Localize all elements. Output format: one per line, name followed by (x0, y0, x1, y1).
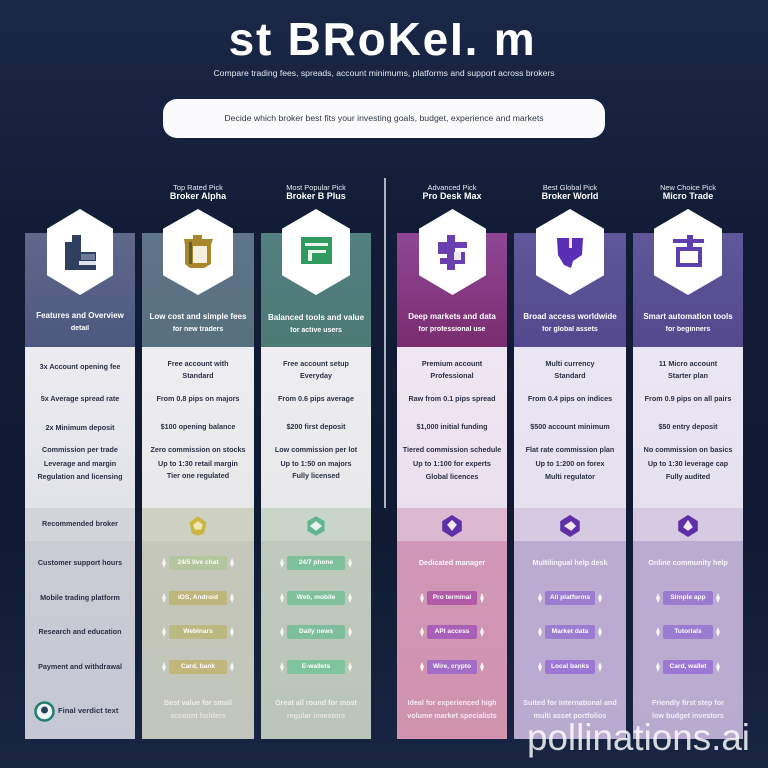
column 3 header band (261, 233, 371, 347)
column 6 lower section (633, 541, 743, 739)
icon: purple shield (557, 238, 583, 268)
footer note: Great all round for most (275, 698, 357, 707)
hexagon (419, 209, 486, 295)
hexagon (654, 209, 722, 295)
row: Recommended broker (42, 519, 118, 528)
icon: gold rating badge (190, 516, 206, 536)
rating pill (545, 660, 595, 674)
column 6 header band (633, 233, 743, 347)
icon: purple glyph (438, 235, 467, 270)
intro pill (163, 99, 605, 138)
column 4 heading: Deep markets and data (408, 312, 496, 321)
column 2 heading second line: for new traders (173, 326, 223, 333)
row: From 0.4 pips on indices (528, 394, 612, 403)
column 2 lower section (142, 541, 254, 739)
title: st BRoKeI. m (229, 13, 536, 65)
column 2 body (142, 347, 254, 508)
rating pill: Web, mobile (297, 594, 335, 601)
row: Multilingual help desk (532, 558, 608, 567)
rating pill (545, 591, 595, 605)
column 5 body (514, 347, 626, 508)
column 6 heading: Smart automation tools (643, 312, 733, 321)
row: Up to 1:100 for experts (413, 459, 491, 468)
column 6 body (633, 347, 743, 508)
rating pill (169, 660, 227, 674)
row: Leverage and margin (44, 459, 116, 468)
row: Fully licensed (292, 471, 340, 480)
row: Flat rate commission plan (526, 445, 614, 454)
panel: column 4 broker (397, 183, 507, 739)
footer note second line: account holders (170, 711, 226, 720)
row: 5x Average spread rate (41, 394, 119, 403)
icon: purple rating badge (678, 515, 698, 537)
column 4 lower section (397, 541, 507, 739)
column 5 header band (514, 233, 626, 347)
row: Up to 1:200 on forex (535, 459, 605, 468)
column 1 body (25, 347, 135, 508)
rating pill: Market data (552, 628, 588, 635)
rating pill (427, 625, 477, 639)
row: Low commission per lot (275, 445, 357, 454)
column 1 heading: Features and Overview (36, 311, 124, 320)
footer note: Ideal for experienced high (407, 698, 497, 707)
column 6 heading second line: for beginners (666, 326, 710, 333)
row: Up to 1:30 leverage cap (648, 459, 728, 468)
panel: column 2 broker (142, 183, 254, 739)
row: No commission on basics (644, 445, 732, 454)
column 4 highlight row (397, 508, 507, 541)
hexagon (163, 209, 233, 295)
row: $500 account minimum (530, 422, 610, 431)
rating pill (427, 591, 477, 605)
column 5 heading second line: for global assets (542, 326, 598, 333)
rating pill (663, 591, 713, 605)
row: $50 entry deposit (658, 422, 718, 431)
row: Tiered commission schedule (403, 445, 501, 454)
watermark: pollinations.ai (527, 717, 750, 758)
panel: column 6 broker (633, 183, 743, 739)
rating pill (169, 591, 227, 605)
row: Starter plan (668, 371, 708, 380)
icon: green rating badge (307, 516, 325, 536)
rating pill: Local banks (551, 663, 589, 670)
rating pill: Card, bank (181, 663, 215, 670)
icon: folder (65, 235, 96, 270)
column 4 label: Advanced Pick (428, 183, 476, 192)
icon: gold box (184, 235, 213, 268)
row: $100 opening balance (161, 422, 235, 431)
column 1 lower section (25, 541, 135, 739)
rating pill (287, 625, 345, 639)
rating pill (663, 660, 713, 674)
column 3 heading second line: for active users (290, 327, 342, 334)
rating pill: E-wallets (302, 663, 330, 670)
vertical divider (384, 178, 386, 508)
column 4 heading second line: for professional use (419, 326, 485, 333)
rating pill: Card, wallet (669, 663, 706, 670)
rating pill (287, 591, 345, 605)
footer note second line: low budget investors (652, 711, 724, 720)
icon: chat badge (34, 701, 55, 722)
column 2 label name: Broker Alpha (170, 191, 226, 201)
rating pill: API access (435, 628, 469, 635)
subtitle: Compare trading fees, spreads, account minimums, platforms and support across brokers (213, 68, 555, 78)
row: From 0.6 pips average (278, 394, 354, 403)
column 6 label name: Micro Trade (663, 191, 713, 201)
icon: purple case (673, 235, 704, 267)
column 3 label: Most Popular Pick (286, 183, 346, 192)
icon: purple rating badge (442, 515, 462, 537)
rating pill: Webinars (183, 628, 213, 635)
rating pill (663, 625, 713, 639)
row: Customer support hours (38, 558, 122, 567)
column 2 label: Top Rated Pick (173, 183, 223, 192)
row: $200 first deposit (286, 422, 346, 431)
row: Up to 1:30 retail margin (158, 459, 238, 468)
rating pill: All platforms (550, 594, 590, 601)
rating pill: Daily news (299, 628, 333, 635)
row: Zero commission on stocks (150, 445, 246, 454)
rating pill (287, 660, 345, 674)
row: Professional (430, 371, 474, 380)
rating pill: iOS, Android (178, 594, 218, 601)
icon: green window (301, 237, 332, 264)
column 1 highlight row (25, 508, 135, 541)
column 6 highlight row (633, 508, 743, 541)
row: Payment and withdrawal (38, 662, 122, 671)
row: Premium account (422, 359, 482, 368)
rating pill: Tutorials (674, 628, 702, 635)
footer note: Friendly first step for (652, 698, 724, 707)
footer note second line: volume market specialists (407, 711, 497, 720)
panel: column 1 features (25, 209, 135, 739)
column 1 header band (25, 233, 135, 347)
row: Final verdict text (58, 706, 118, 715)
rating pill (169, 625, 227, 639)
row: 2x Minimum deposit (45, 423, 115, 432)
rating pill (287, 556, 345, 570)
row: Standard (554, 371, 586, 380)
rating pill: Pro terminal (433, 594, 471, 601)
footer note second line: regular investors (287, 711, 345, 720)
row: Commission per trade (42, 445, 118, 454)
footer note: Suited for international and (523, 698, 617, 707)
column 3 body (261, 347, 371, 508)
row: Everyday (300, 371, 332, 380)
column 4 header band (397, 233, 507, 347)
column 1 heading second line: detail (71, 325, 89, 332)
hexagon (47, 209, 113, 295)
hexagon (536, 209, 604, 295)
row: Multi currency (545, 359, 595, 368)
row: Multi regulator (545, 472, 595, 481)
column 4 body (397, 347, 507, 508)
rating pill: Wire, crypto (433, 663, 471, 670)
hexagon (282, 209, 350, 295)
rating pill (545, 625, 595, 639)
panel: column 5 broker (514, 183, 626, 739)
row: Raw from 0.1 pips spread (408, 394, 496, 403)
row: Mobile trading platform (40, 593, 120, 602)
row: Research and education (38, 627, 122, 636)
column 2 heading: Low cost and simple fees (150, 312, 246, 321)
footer note: Best value for small (164, 698, 232, 707)
row: Online community help (648, 558, 728, 567)
column 5 label name: Broker World (542, 191, 598, 201)
row: 3x Account opening fee (40, 362, 120, 371)
row: Tier one regulated (167, 471, 229, 480)
row: 11 Micro account (659, 359, 717, 368)
row: Free account setup (283, 359, 349, 368)
column 5 heading: Broad access worldwide (523, 312, 617, 321)
column 5 lower section (514, 541, 626, 739)
row: From 0.9 pips on all pairs (645, 394, 731, 403)
row: Regulation and licensing (37, 472, 123, 481)
column 6 label: New Choice Pick (660, 183, 716, 192)
row: From 0.8 pips on majors (156, 394, 240, 403)
rating pill: 24/5 live chat (177, 559, 219, 566)
rating pill (169, 556, 227, 570)
rating pill: 24/7 phone (299, 559, 333, 566)
column 2 header band (142, 233, 254, 347)
panel: column 3 broker (261, 183, 371, 739)
icon: purple rating badge (560, 515, 580, 537)
column 3 label name: Broker B Plus (286, 191, 346, 201)
rating pill (427, 660, 477, 674)
row: $1,000 initial funding (416, 422, 488, 431)
column 2 highlight row (142, 508, 254, 541)
row: Standard (182, 371, 214, 380)
footer note second line: multi asset portfolios (534, 711, 606, 720)
row: Fully audited (666, 472, 710, 481)
row: Global licences (426, 472, 478, 481)
column 5 label: Best Global Pick (543, 183, 597, 192)
column 3 lower section (261, 541, 371, 739)
intro pill: Decide which broker best fits your investing goals, budget, experience and markets (224, 113, 544, 123)
row: Dedicated manager (419, 558, 485, 567)
column 3 highlight row (261, 508, 371, 541)
rating pill: Simple app (670, 594, 706, 601)
column 4 label name: Pro Desk Max (422, 191, 482, 201)
column 5 highlight row (514, 508, 626, 541)
row: Up to 1:50 on majors (280, 459, 352, 468)
column 3 heading: Balanced tools and value (268, 313, 364, 322)
row: Free account with (167, 359, 229, 368)
